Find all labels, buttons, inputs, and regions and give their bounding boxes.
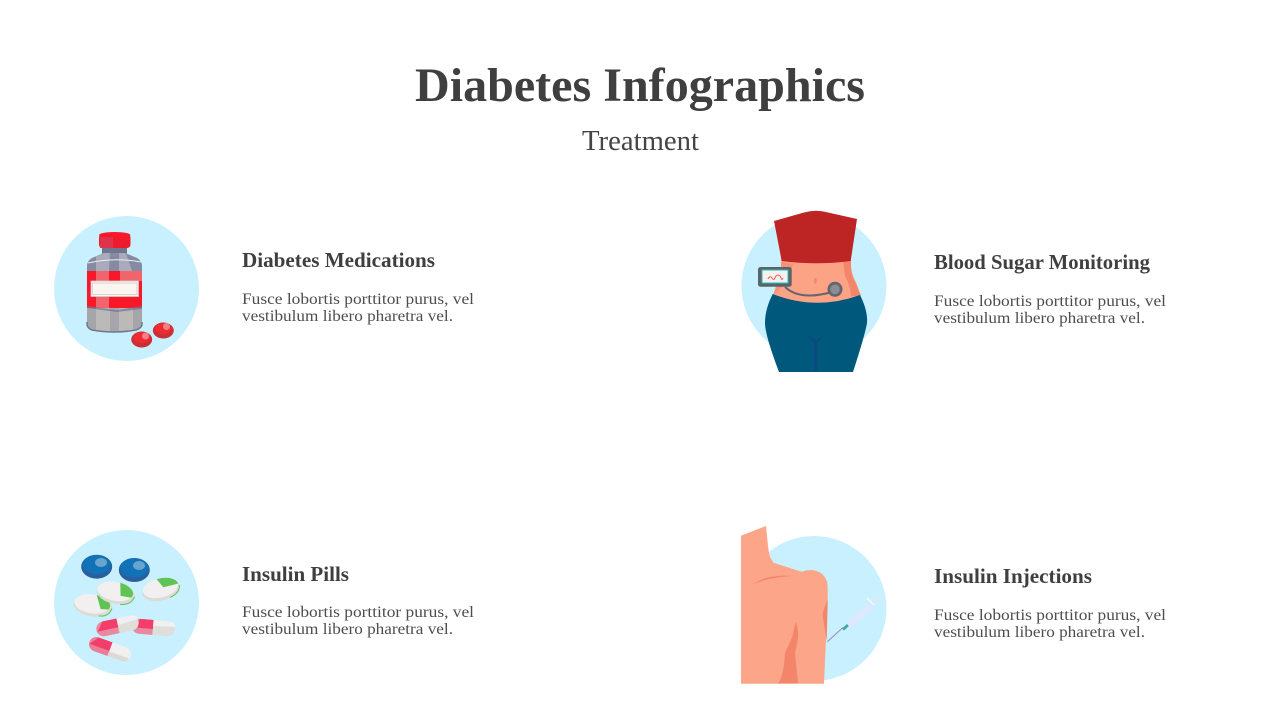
text block: vestibulum libero pharetra vel. bbox=[242, 308, 453, 325]
icon: assorted pills bbox=[54, 530, 199, 675]
heading: Insulin Pills bbox=[242, 562, 349, 586]
text block: Fusce lobortis porttitor purus, vel bbox=[934, 293, 1167, 310]
heading: Diabetes Medications bbox=[242, 248, 435, 272]
text block: vestibulum libero pharetra vel. bbox=[934, 624, 1145, 641]
icon: medicine bottle bbox=[54, 216, 199, 361]
text block bbox=[242, 604, 475, 638]
panel: insulin pills bbox=[54, 530, 475, 675]
text block: vestibulum libero pharetra vel. bbox=[934, 310, 1145, 327]
heading: Insulin Injections bbox=[934, 564, 1092, 588]
panel: blood sugar monitoring bbox=[742, 211, 1167, 372]
subtitle: Treatment bbox=[582, 126, 699, 157]
panel: insulin injections bbox=[741, 526, 1167, 684]
icon: shoulder and syringe bbox=[741, 526, 886, 684]
text block bbox=[242, 291, 475, 325]
panel: diabetes medications bbox=[54, 216, 475, 361]
text block: Fusce lobortis porttitor purus, vel bbox=[242, 604, 475, 621]
text block bbox=[934, 293, 1167, 327]
text block: vestibulum libero pharetra vel. bbox=[242, 621, 453, 638]
text block: Fusce lobortis porttitor purus, vel bbox=[242, 291, 475, 308]
text block: Fusce lobortis porttitor purus, vel bbox=[934, 607, 1167, 624]
title: Diabetes Infographics bbox=[415, 59, 865, 112]
heading: Blood Sugar Monitoring bbox=[934, 250, 1150, 274]
text block bbox=[934, 607, 1167, 641]
icon: torso with glucose monitor bbox=[742, 211, 886, 372]
